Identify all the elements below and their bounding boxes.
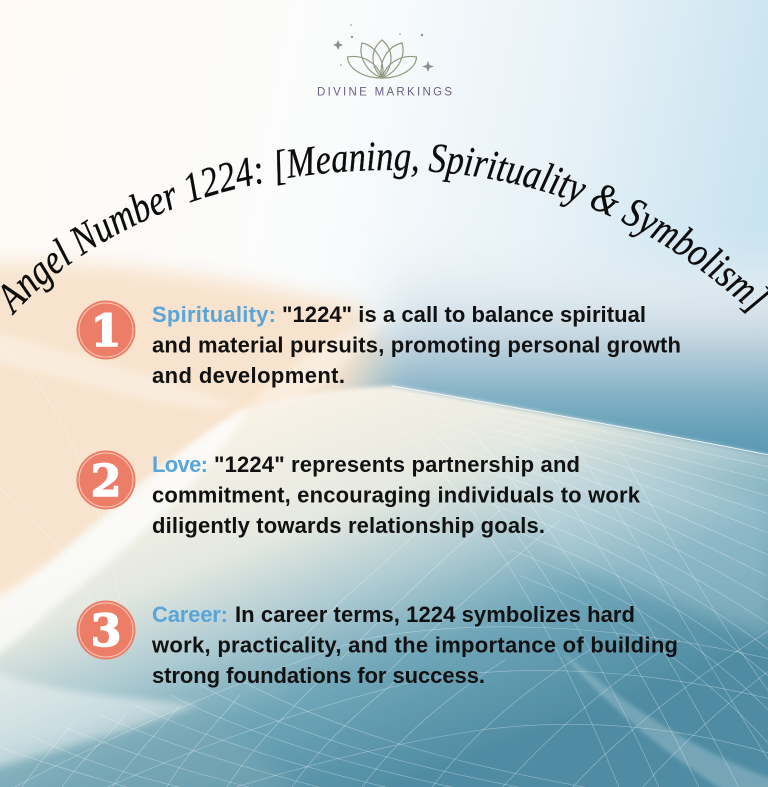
text block 2: Love: <box>152 452 208 477</box>
text block 2 <box>152 452 641 538</box>
white mesh lines <box>0 335 768 787</box>
text block 2: diligently towards relationship goals. <box>152 513 545 538</box>
badge 1: 1 <box>91 306 121 357</box>
text block 3 <box>151 602 678 688</box>
text block 1: "1224" is a call to balance spiritual <box>282 302 646 327</box>
item 2: love <box>76 450 641 538</box>
text block 3: Career: <box>152 602 228 627</box>
text block 1: Spirituality: <box>152 302 276 327</box>
item 1: spirituality <box>76 300 681 388</box>
logo wordmark: DIVINE MARKINGS <box>317 86 452 98</box>
text block 1: and development. <box>152 363 345 388</box>
badge 2 <box>76 450 136 510</box>
icon: sparkles <box>333 24 434 72</box>
item 3: career <box>76 600 678 688</box>
text block 1 <box>152 302 681 388</box>
icon: lotus <box>348 40 416 78</box>
logo: Divine Markings <box>317 24 452 99</box>
badge 3: 3 <box>91 606 121 657</box>
text block 3: work, practicality, and the importance of building <box>151 632 678 658</box>
badge 2: 2 <box>91 456 121 507</box>
text block 3: In career terms, 1224 symbolizes hard <box>235 602 635 627</box>
badge 1 <box>76 300 136 360</box>
badge 3 <box>76 600 136 660</box>
text block 2: commitment, encouraging individuals to work <box>152 482 641 508</box>
text block 3: strong foundations for success. <box>152 663 485 688</box>
text block 1: and material pursuits, promoting personal growth <box>152 332 681 358</box>
text block 2: "1224" represents partnership and <box>214 452 580 477</box>
